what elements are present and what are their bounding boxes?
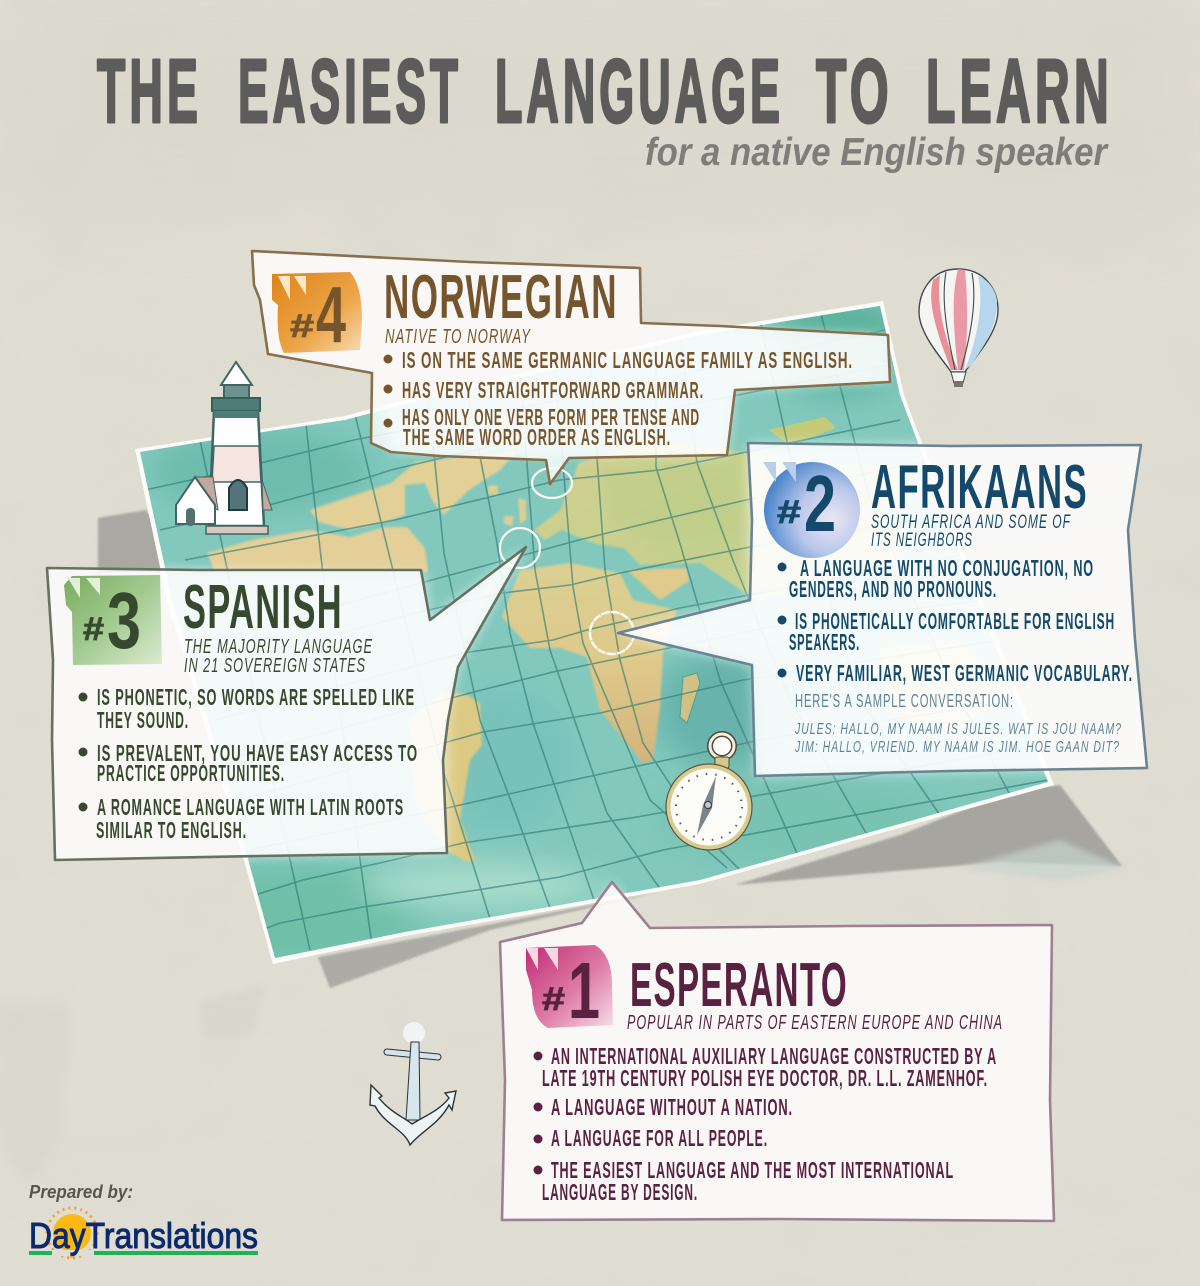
panel: spanish <box>47 547 526 860</box>
map drop shadows <box>98 510 1125 988</box>
badge: #4: # <box>290 308 314 344</box>
land: arabia <box>627 568 689 600</box>
icon: lighthouse <box>176 362 272 534</box>
bullet list <box>384 347 853 450</box>
bullet list <box>78 684 418 843</box>
title: THE <box>97 42 202 142</box>
title: TO <box>816 42 893 142</box>
panel outline <box>252 251 890 484</box>
subheading: THE MAJORITY LANGUAGE <box>184 636 373 658</box>
bullet list: LANGUAGE BY DESIGN. <box>542 1179 698 1205</box>
badge: #2 <box>763 459 860 558</box>
bullet list: IS PREVALENT, YOU HAVE EASY ACCESS TO <box>97 740 418 766</box>
bullet list: SPEAKERS. <box>789 629 860 655</box>
bullet list: HAS ONLY ONE VERB FORM PER TENSE AND <box>402 404 700 430</box>
icon: anchor <box>370 1022 456 1145</box>
heading: SPANISH <box>183 573 343 642</box>
subheading: NATIVE TO NORWAY <box>385 326 531 348</box>
bullet list: IS PHONETIC, SO WORDS ARE SPELLED LIKE <box>97 684 415 710</box>
location marker: south africa <box>590 612 634 654</box>
location marker: norway <box>532 468 572 498</box>
bullet list: A ROMANCE LANGUAGE WITH LATIN ROOTS <box>97 794 404 820</box>
badge: #2: # <box>777 494 801 530</box>
badge: #4 <box>272 270 362 359</box>
grid lines <box>145 310 1048 950</box>
panel outline <box>500 882 1054 1221</box>
bullet list: A LANGUAGE WITHOUT A NATION. <box>551 1094 793 1120</box>
title: LANGUAGE <box>495 42 784 142</box>
subheading: SOUTH AFRICA AND SOME OF <box>871 512 1071 533</box>
land: north america <box>207 527 428 572</box>
location marker: spain <box>500 528 540 568</box>
title <box>97 42 1113 142</box>
land: australia <box>880 640 1010 735</box>
badge: #1: 1 <box>568 946 600 1035</box>
world map <box>135 301 1054 964</box>
prepared by label: Prepared by: <box>29 1182 133 1202</box>
badge: #4: 4 <box>316 270 346 359</box>
panel: spanish: IN 21 SOVEREIGN STATES <box>184 655 366 677</box>
land: madagascar <box>680 673 700 723</box>
sample conversation <box>794 691 1122 756</box>
panel: norwegian <box>252 251 890 484</box>
sample conversation: HERE'S A SAMPLE CONVERSATION: <box>795 691 1014 711</box>
title: EASIEST <box>238 42 462 142</box>
bullet list <box>534 1043 997 1205</box>
panel outline <box>47 547 526 860</box>
bullet list: PRACTICE OPPORTUNITIES. <box>97 760 285 786</box>
land: eurasia <box>534 448 754 596</box>
bullet list: HAS VERY STRAIGHTFORWARD GRAMMAR. <box>402 377 704 403</box>
bullet list: IS ON THE SAME GERMANIC LANGUAGE FAMILY AS ENGLISH. <box>402 347 853 373</box>
panel: esperanto <box>500 882 1054 1221</box>
badge: #1: # <box>542 981 565 1017</box>
badge: #1 <box>526 945 613 1035</box>
badge: #3: 3 <box>107 576 141 665</box>
panel: afrikaans <box>618 443 1147 776</box>
logo: day translations: DayTranslations <box>29 1215 258 1256</box>
land: island <box>768 417 836 445</box>
panel: afrikaans: ITS NEIGHBORS <box>871 530 973 551</box>
bullet list: SIMILAR TO ENGLISH. <box>96 817 247 843</box>
badge: #3: # <box>83 611 104 647</box>
heading: ESPERANTO <box>630 951 848 1020</box>
badge: #3 <box>64 575 162 665</box>
heading: NORWEGIAN <box>384 263 618 332</box>
subtitle: for a native English speaker <box>645 131 1109 174</box>
bullet list: GENDERS, AND NO PRONOUNS. <box>789 576 997 602</box>
panel glows <box>164 322 1046 899</box>
badge: #2: 2 <box>804 459 836 548</box>
icon: hot air balloon <box>919 269 998 387</box>
bullet list <box>778 555 1133 686</box>
panel outline <box>618 443 1147 776</box>
land: iceland and britain <box>488 485 526 526</box>
icon: compass <box>666 734 752 850</box>
bullet list: THE SAME WORD ORDER AS ENGLISH. <box>403 424 671 450</box>
land: south america <box>421 692 484 863</box>
map paper edge <box>135 301 1054 964</box>
land: arctic coast <box>310 452 516 530</box>
bullet list: A LANGUAGE FOR ALL PEOPLE. <box>551 1125 768 1151</box>
land: africa <box>502 563 677 763</box>
bullet list: THEY SOUND. <box>97 707 189 733</box>
